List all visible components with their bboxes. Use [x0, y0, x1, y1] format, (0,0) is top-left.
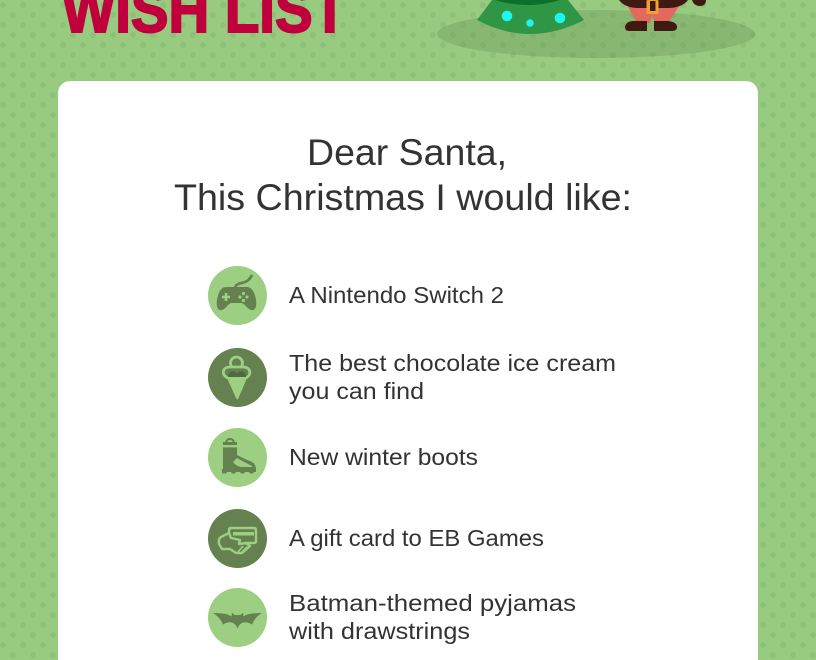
panel: letter card: [58, 81, 758, 660]
list item text: nintendo switch: A Nintendo Switch 2: [289, 282, 504, 308]
list item text: batman pyjamas: Batman-themed pyjamas: [289, 590, 576, 616]
heading: dear santa: Dear Santa,: [307, 132, 507, 173]
ground shadow: [437, 10, 755, 58]
list item text: batman pyjamas: with drawstrings: [288, 618, 470, 644]
list item text: ice cream: The best chocolate ice cream: [289, 350, 616, 376]
list item text: ice cream: you can find: [289, 378, 424, 404]
list item text: ice cream: [289, 350, 616, 404]
illustration: christmas tree: [477, 0, 584, 34]
icon: ice cream: [208, 348, 267, 407]
icon: gift card in hand: [208, 509, 267, 568]
heading: dear santa: This Christmas I would like:: [174, 177, 632, 218]
icon: winter boot: [208, 428, 267, 487]
heading: dear santa: [174, 132, 632, 218]
illustration: santa: [619, 0, 706, 31]
list item text: gift card: A gift card to EB Games: [289, 525, 544, 551]
icon: game controller: [208, 266, 267, 325]
list item text: batman pyjamas: [288, 590, 576, 644]
list item text: boots: New winter boots: [289, 444, 478, 470]
icon: batman logo: [208, 588, 267, 647]
